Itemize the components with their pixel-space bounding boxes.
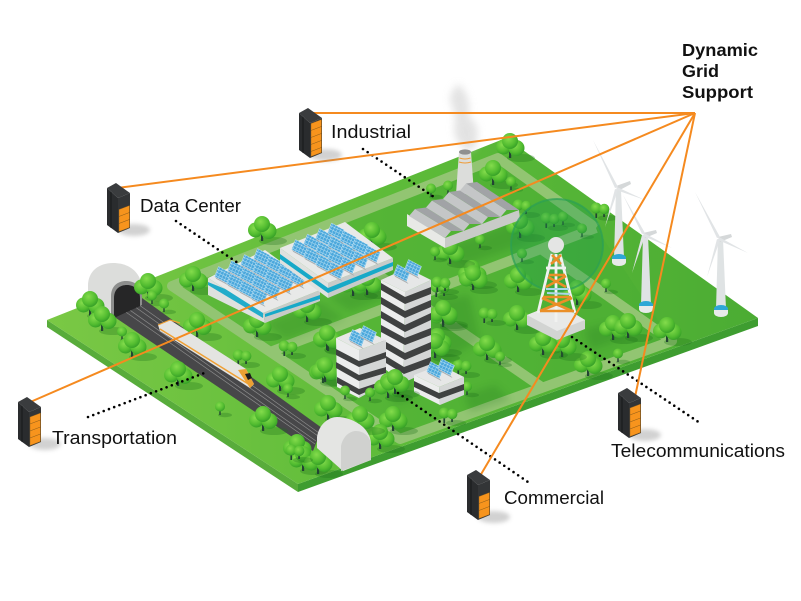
label: commercial: Commercial [504, 487, 604, 508]
high speed train [158, 320, 254, 388]
label: industrial: Industrial [331, 121, 411, 142]
railway track [113, 298, 322, 451]
trees [76, 133, 692, 478]
chimney [456, 149, 474, 194]
solar building: right [280, 222, 393, 298]
dotted leader: transportation [88, 372, 207, 417]
low-rise building [414, 358, 464, 405]
dotted leader: commercial [398, 393, 528, 482]
label: telecommunications: Telecommunications [611, 440, 785, 461]
battery cabinet: transportation [18, 397, 61, 450]
heading: dynamic grid support: Dynamic [682, 40, 758, 60]
battery cabinet: data center [107, 183, 150, 236]
solar building: left [208, 248, 320, 323]
label: data center: Data Center [140, 195, 241, 216]
smoke plume [450, 84, 478, 150]
battery cabinet: industrial [299, 108, 342, 161]
mid-rise building [336, 326, 386, 398]
battery cabinet: telecommunications [618, 388, 661, 441]
telecom signal bubble [511, 199, 603, 291]
heading: dynamic grid support [682, 40, 758, 102]
heading: dynamic grid support: Grid [682, 61, 719, 81]
factory [407, 182, 520, 248]
dotted leader: telecommunications [572, 337, 700, 423]
dotted leader: data center [176, 221, 238, 263]
wind turbine 3 [695, 192, 748, 317]
front trees [340, 369, 420, 403]
building shadows [265, 220, 625, 412]
ground platform [47, 138, 758, 492]
battery cabinet: commercial [467, 470, 510, 523]
dotted leader: industrial [363, 149, 434, 197]
orange connection lines [28, 113, 695, 476]
road network [172, 158, 672, 439]
label: transportation: Transportation [52, 427, 177, 448]
heading: dynamic grid support: Support [682, 82, 753, 102]
wind turbine 1 [593, 140, 645, 266]
tunnel entrance [88, 263, 142, 318]
tunnel exit [317, 417, 371, 471]
tall office tower [381, 260, 431, 383]
communication tower [527, 237, 585, 340]
wind turbine 2 [623, 195, 672, 313]
